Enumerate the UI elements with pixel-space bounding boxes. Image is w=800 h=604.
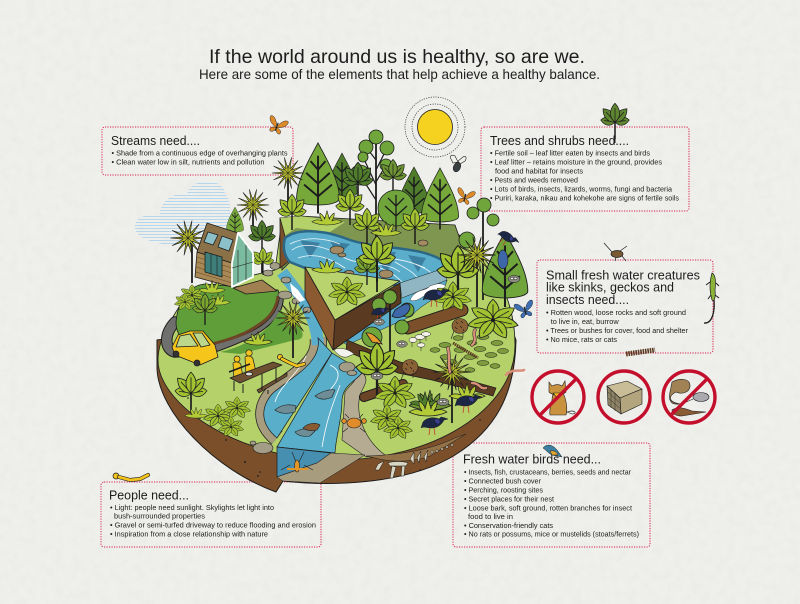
panel: small fresh water creatures need [537,260,713,353]
text block: creatures list: • Trees or bushes for cover, food and shelter [546,326,688,335]
mid bank soil [346,340,496,396]
plateau grass [305,267,400,320]
kiwi birds [451,318,468,339]
glass gable [232,233,253,287]
plateau left soil [305,267,335,350]
bright fern [251,248,275,275]
round tree [350,130,394,250]
dark fern [248,220,276,254]
grey rocks front [250,362,357,454]
text block: trees list: • Fertile soil – leaf litter eaten by insects and birds [490,149,650,158]
green hill [176,284,279,347]
person seated left [233,356,243,380]
panel: fresh water birds need [453,443,650,547]
icon: kingfisher [543,445,562,457]
water swirls [290,239,434,282]
person seated right [245,350,256,376]
fish [275,390,335,436]
worms [448,330,486,388]
text block: streams list: • Clean water low in silt, nutrients and pollution [112,158,264,167]
panel: streams need [102,127,293,175]
icon: no pests sign [663,371,715,423]
heading: small creatures [546,268,700,307]
icon: cloud [135,181,230,245]
text block: trees list: • Leaf litter – retains moisture in the ground, provides [490,158,662,167]
text block: people list: • Light: people need sunlight. Skylights let light into [110,503,274,512]
lower river left part [264,338,332,438]
water insect [281,452,313,472]
rotting log lower [364,384,403,397]
picnic scene [229,350,304,394]
heading: birds need: Fresh water birds need... [463,452,601,466]
palm behind house [252,205,254,240]
lower river [264,338,363,453]
tui on pine [494,227,520,252]
right pine and bush [433,198,528,312]
pukeko on ground [421,417,448,435]
table legs [234,368,276,394]
icon: person lying on people box [113,473,148,480]
text block: birds list: • Loose bark, soft ground, rotten branches for insect [464,503,633,512]
icon: orange butterfly top [266,115,289,136]
text block: creatures list: • Rotten wood, loose rocks and soft ground [546,308,686,317]
icon: blue butterfly [514,300,536,319]
heading: trees and shrubs need: Trees and shrubs need.... [490,134,629,148]
text block: trees list: • Puriri, karaka, nikau and kohekohe are signs of fertile soils [490,193,679,202]
deck [233,280,277,294]
text block: creatures list: • No mice, rats or cats [546,335,617,344]
text block: people list: • Gravel or semi-turfed driveway to reduce flooding and erosion [110,521,316,530]
water reflections [300,240,426,276]
heading: small creatures: like skinks, geckos and [546,281,674,295]
text block: people list [110,503,316,539]
rotting log upper [408,310,462,328]
back bank [280,216,462,270]
tan river bank left [264,338,318,438]
illustration: island disc [157,130,528,492]
centipede on ground [453,343,478,358]
bench seat back [229,364,250,372]
subtitle: Here are some of the elements that help achieve a healthy balance. [199,66,600,82]
plateau right soil [333,283,401,350]
palm by stream [276,302,310,358]
pukeko by waterfall [423,289,450,307]
text block: birds list: • Conservation-friendly cats [464,521,553,530]
palm beside house [191,240,193,283]
foam small [290,283,305,302]
text block: birds list: • No rats or possums, mice or mustelids (stoats/ferrets) [464,530,639,539]
road [167,300,278,352]
mid tree with birds [362,290,414,358]
text block: people list: • Inspiration from a close relationship with nature [110,530,268,539]
roof [197,223,238,263]
stoat [672,408,706,416]
table top [230,362,282,383]
waterfall foam [410,284,446,301]
lower river right part [277,353,363,453]
palm left top [287,173,289,208]
plateau island [305,267,401,350]
crab [342,414,366,432]
background tree group [272,130,459,250]
plateau plants [312,236,397,307]
icon: sun [405,97,465,157]
text block: trees list: food and habitat for insects [495,167,583,176]
rotting log lower fill [364,384,403,397]
nest on pine [508,275,520,283]
plants around house [170,189,276,283]
car [172,331,218,366]
foreground left plants [174,372,251,437]
icon: loose worm [506,370,524,375]
right soil band [366,434,466,461]
text block: streams list [112,149,288,167]
text block: trees list: • Lots of birds, insects, lizards, worms, fungi and bacteria [490,184,673,193]
text block: birds list: • Insects, fish, crustaceans, berries, seeds and nectar [464,468,631,477]
house [195,223,277,294]
plates [246,372,252,376]
text block: birds list [464,468,639,539]
upper river [284,231,445,286]
big round tree [378,190,414,235]
leaf litter plants [430,334,508,372]
lower stream [334,280,447,345]
tree fern group foreground [355,342,485,440]
text block: birds list: • Connected bush cover [464,477,541,486]
rotting log upper fill [408,310,462,328]
person lying down [277,354,304,366]
pukeko in tree [371,307,390,320]
kingfisher on branch [366,333,382,344]
front cut water [277,447,331,477]
bench [257,373,287,393]
soil speckles [187,397,481,477]
icon: gecko [704,273,719,323]
text block: birds list: • Secret places for their nest [464,494,555,503]
fossil bones [375,444,453,478]
icon: centipede [626,350,655,354]
blue bird on pine [498,250,508,269]
blue pigeon [392,304,410,318]
icon: no cats sign [532,371,584,423]
text block: birds list: food to live in [468,512,513,521]
soil base [157,300,516,492]
icon: flying bee [450,155,466,173]
text block: birds list: • Perching, roosting sites [464,485,543,494]
heading: small creatures: insects need.... [546,293,629,307]
hill plants [174,280,230,325]
grass surface [158,220,515,460]
icon: weta insect [604,243,627,261]
heading: small creatures: Small fresh water creatures [546,268,700,282]
text block: people list: bush-surrounded properties [114,512,205,521]
wood wall [195,252,232,287]
stream rocks [263,262,311,313]
round tree right [459,198,499,300]
text block: creatures list [546,308,688,344]
text block: trees list [490,149,679,202]
panel: trees and shrubs need [481,127,689,211]
ferns on back bank [277,194,307,230]
text block: streams list: • Shade from a continuous edge of overhanging plants [112,149,288,158]
water lines [275,356,340,447]
text block: creatures list: to live in, eat, burrow [551,317,619,326]
mushrooms [409,332,430,351]
tan river bank right [342,372,385,457]
pukeko by plants [455,395,482,413]
icon: leaf on trees box [600,103,630,143]
rocks in upper river [330,240,428,278]
small pine [226,207,244,235]
skylights [204,232,233,251]
text block: trees list: • Pests and weeds removed [490,175,578,184]
side stream [282,272,318,345]
title: If the world around us is healthy, so are we. [209,46,585,68]
pine trees [327,153,357,203]
icon: trap sign [598,371,650,423]
cat [549,381,575,415]
window [205,252,222,277]
rat [693,392,709,402]
possum [669,379,690,404]
heading: streams need: Streams need.... [111,134,200,148]
rosette right [466,299,520,341]
front cut sand [277,453,365,483]
panel: people need [101,482,321,547]
hill rim [207,296,278,345]
icon: orange butterfly right [455,187,476,206]
tuft by road [244,332,272,345]
heading: people need: People need... [109,488,189,502]
waterfall [400,268,447,300]
white bird [334,348,354,357]
green slope beside river [220,310,303,354]
